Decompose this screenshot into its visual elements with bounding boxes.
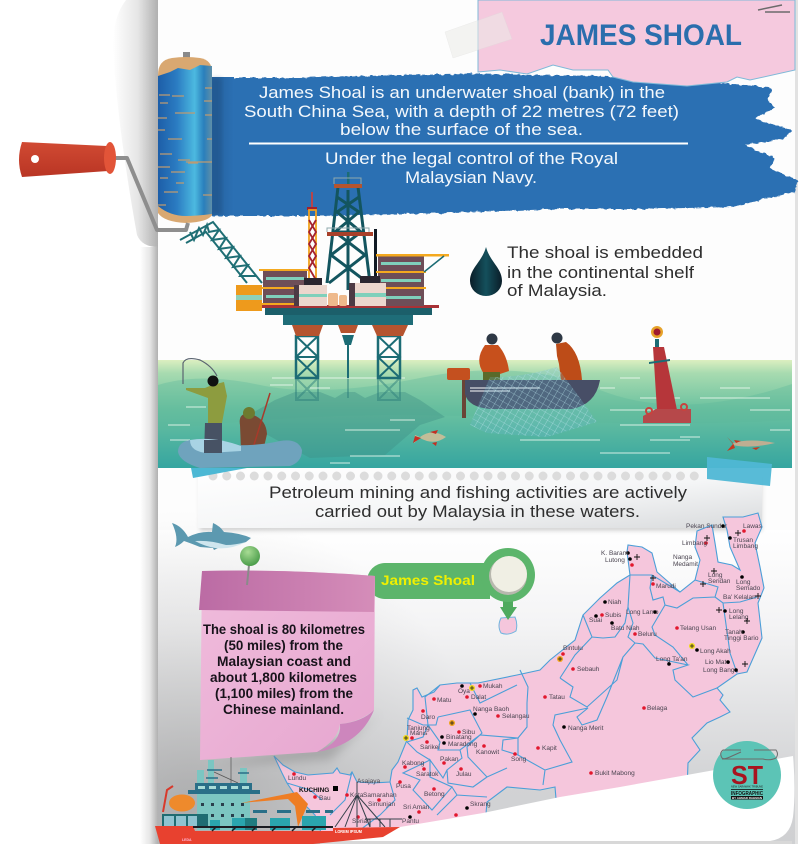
note text — [203, 621, 365, 717]
marker arrow — [500, 598, 517, 620]
cities north-east: Trusan — [733, 537, 753, 544]
cities central: Pusa — [396, 783, 411, 790]
banner text: Under the legal control of the Royal — [325, 149, 618, 168]
leg collars — [292, 325, 408, 336]
ST logo: ST — [731, 760, 763, 790]
cities north-east: Long — [736, 579, 751, 586]
cities north-east: Long Lamo — [626, 609, 659, 616]
oil platform — [180, 172, 449, 378]
paint roller — [19, 52, 222, 230]
cities west: Lundu — [288, 775, 306, 782]
cities north-east: Belaga — [647, 705, 668, 712]
cities central: Manis — [410, 730, 428, 737]
cities north-east: Long Banga — [703, 667, 738, 674]
cities north-east: Pekan Sundar — [686, 523, 728, 530]
cities north-east: Long — [729, 608, 744, 615]
aft cabin — [162, 814, 208, 827]
handle wire — [115, 158, 188, 230]
cargo — [210, 810, 333, 830]
cities central: Skrang — [470, 801, 491, 808]
shoal text: The shoal is embedded — [507, 243, 703, 262]
fisherman one — [479, 334, 509, 380]
ship: LEDA — [182, 838, 192, 842]
banner text: below the surface of the sea. — [340, 120, 583, 139]
lifeboat — [163, 786, 195, 812]
cities north-east: Tinggi Bario — [724, 635, 759, 642]
banner text: James Shoal is an underwater shoal (bank) in the — [259, 83, 665, 102]
crane boom — [180, 222, 262, 283]
cities west: Bau — [319, 795, 331, 802]
cities central: Sibu — [462, 729, 475, 736]
tape: right — [707, 457, 772, 486]
cities north-east: Lio Mato — [705, 659, 730, 666]
note text: (50 miles) from the — [224, 637, 343, 653]
roller sleeve — [158, 57, 212, 223]
cities central: Binatang — [446, 734, 472, 741]
border crossing markers — [403, 530, 761, 741]
cities central: Dalat — [471, 694, 486, 701]
sticky note — [199, 571, 380, 765]
note pin — [240, 546, 260, 585]
shoal text: in the continental shelf — [507, 263, 694, 282]
cities west: Samarahan — [363, 792, 397, 799]
district boundaries — [287, 575, 757, 830]
cities north-east — [561, 523, 763, 712]
cities north-east: Long — [708, 572, 723, 579]
cities north-east: K. Baram — [601, 550, 628, 557]
handle hole — [31, 155, 39, 163]
cities north-east: Ba' Kelalan — [723, 594, 756, 601]
cities central: Sarikei — [420, 744, 440, 751]
crane arm — [241, 792, 308, 827]
note text: (1,100 miles) from the — [215, 685, 353, 701]
right deck modules — [376, 254, 449, 306]
paper strip panel — [198, 468, 762, 531]
cities central: Sri Aman — [403, 804, 430, 811]
cities north-east: Sebauh — [577, 666, 600, 673]
cities central: Daro — [421, 714, 435, 721]
cities central: Oya — [458, 688, 470, 695]
banner text — [244, 83, 688, 187]
cities north-east: Lelang — [729, 614, 749, 621]
icon: oil drop — [470, 247, 502, 296]
painted blue banner — [205, 74, 797, 216]
cities north-east: Long Ta'an — [656, 656, 688, 663]
strip text: Petroleum mining and fishing activities are actively — [269, 483, 688, 502]
cities north-east: Niah — [608, 599, 622, 606]
outboard motor — [447, 368, 470, 418]
cities north-east: Long Akah — [700, 648, 731, 655]
cities central: Bukit Mabong — [595, 770, 635, 777]
title panel — [478, 0, 795, 86]
tape: left — [191, 468, 247, 478]
cities north-east: Lutong — [605, 557, 625, 564]
James Shoal island — [499, 617, 517, 634]
support legs — [296, 335, 400, 378]
shoal text — [507, 243, 703, 300]
region fill — [274, 513, 764, 844]
cities central: Saratok — [416, 771, 439, 778]
Sarawak Tribune badge: NEW SARAWAK TRIBUNE — [731, 784, 763, 788]
note text: The shoal is 80 kilometres — [203, 621, 365, 637]
hull — [155, 826, 400, 844]
roller shadow — [212, 78, 222, 214]
buoy — [643, 326, 691, 423]
cities north-east: Batu Niah — [611, 625, 640, 632]
cities central: Tatau — [549, 694, 565, 701]
label text: James Shoal — [381, 572, 475, 588]
cities central: Nanga Baoh — [473, 706, 510, 713]
James Shoal location pin — [367, 548, 535, 620]
cities north-east: Marudi — [656, 583, 676, 590]
cities central — [396, 683, 635, 825]
Sarawak Tribune badge: INFOGRAPHIC — [731, 791, 763, 797]
sea — [158, 360, 792, 470]
deck houses and tanks — [294, 276, 386, 306]
cities north-east: Seridan — [708, 578, 731, 585]
anglers in dinghy — [178, 359, 302, 468]
safety pin — [721, 750, 778, 760]
map of Sarawak — [274, 513, 764, 844]
cities north-east: Lawas — [743, 523, 763, 530]
marker ring — [481, 548, 535, 602]
derrick tower — [327, 187, 370, 290]
cities north-east: Medamit — [673, 561, 698, 568]
cities west — [288, 772, 397, 825]
icon: shark — [172, 523, 251, 550]
cities central: Song — [511, 756, 527, 763]
cities central: Tanjung — [407, 725, 430, 732]
flare tower — [307, 192, 317, 280]
cities central: Nanga Merit — [568, 725, 604, 732]
axle peg — [183, 52, 190, 60]
cities north-east: Suai — [589, 617, 602, 624]
cities central: Kanowit — [476, 749, 499, 756]
cities central: Julau — [456, 771, 472, 778]
cities west: Kota — [350, 792, 364, 799]
cities north-east: Limbang — [733, 543, 758, 550]
pencil marks — [758, 5, 790, 12]
banner text: Malaysian Navy. — [405, 168, 537, 187]
cities north-east: Subis — [605, 612, 622, 619]
cities central: Kapit — [542, 745, 557, 752]
dinghy — [178, 440, 302, 468]
cities west: KUCHING — [299, 787, 329, 794]
Sarawak Tribune badge — [713, 741, 781, 809]
ship — [155, 757, 402, 844]
hull — [465, 380, 600, 409]
bridge — [188, 783, 260, 794]
worn paint streaks — [158, 88, 212, 205]
cities north-east: Bintulu — [563, 645, 583, 652]
pontoon deck — [283, 315, 413, 325]
fishing rod — [183, 359, 217, 384]
cities north-east: Telang Usan — [680, 625, 717, 632]
label pill — [367, 563, 490, 599]
shoal text: of Malaysia. — [507, 281, 607, 300]
cities central: Kabong — [402, 760, 425, 767]
cities north-east: Beluru — [638, 631, 657, 638]
heading: James Shoal: JAMES SHOAL — [540, 19, 742, 52]
net — [470, 367, 597, 437]
cities north-east: Semado — [736, 585, 761, 592]
cities west: Simunjan — [368, 801, 395, 808]
hull text: LOREM IPSUM — [335, 829, 362, 834]
cities west: Asajaya — [357, 778, 381, 785]
standing angler — [186, 376, 227, 453]
cities central: Mukah — [483, 683, 503, 690]
fishing boat with net — [447, 332, 600, 437]
foremast and rigging — [335, 782, 385, 827]
page curl — [320, 756, 794, 844]
superstructure — [197, 794, 250, 830]
cities west: Serian — [352, 818, 371, 825]
cities central: Matu — [437, 697, 452, 704]
Sarawak Tribune badge: BY AHMAD RAHMAN — [732, 796, 762, 800]
cities north-east: Nanga — [673, 554, 693, 561]
fisherman two — [552, 332, 582, 380]
fish: perch — [413, 430, 446, 446]
cities central: Maradong — [448, 741, 478, 748]
note text: Chinese mainland. — [223, 701, 344, 717]
cities central: Pantu — [402, 818, 419, 825]
note text: Malaysian coast and — [217, 653, 351, 669]
note text: about 1,800 kilometres — [210, 669, 357, 685]
left deck modules — [236, 269, 309, 311]
red handle — [19, 142, 108, 177]
tape on title panel — [445, 12, 512, 58]
derrick decks — [327, 172, 373, 236]
strip text — [269, 483, 688, 521]
funnels and mast — [197, 757, 249, 783]
banner text: South China Sea, with a depth of 22 metres (72 feet) — [244, 102, 679, 121]
cities north-east: Tanah — [725, 629, 743, 636]
cities central: Pakan — [440, 756, 459, 763]
paper sheet — [158, 0, 795, 844]
seated angler — [240, 393, 270, 450]
fish: pike — [727, 437, 775, 451]
strip text: carried out by Malaysia in these waters. — [315, 502, 640, 521]
cities central: Selangau — [502, 713, 530, 720]
cities north-east: Limbang — [682, 540, 707, 547]
cities central: Betong — [424, 791, 445, 798]
